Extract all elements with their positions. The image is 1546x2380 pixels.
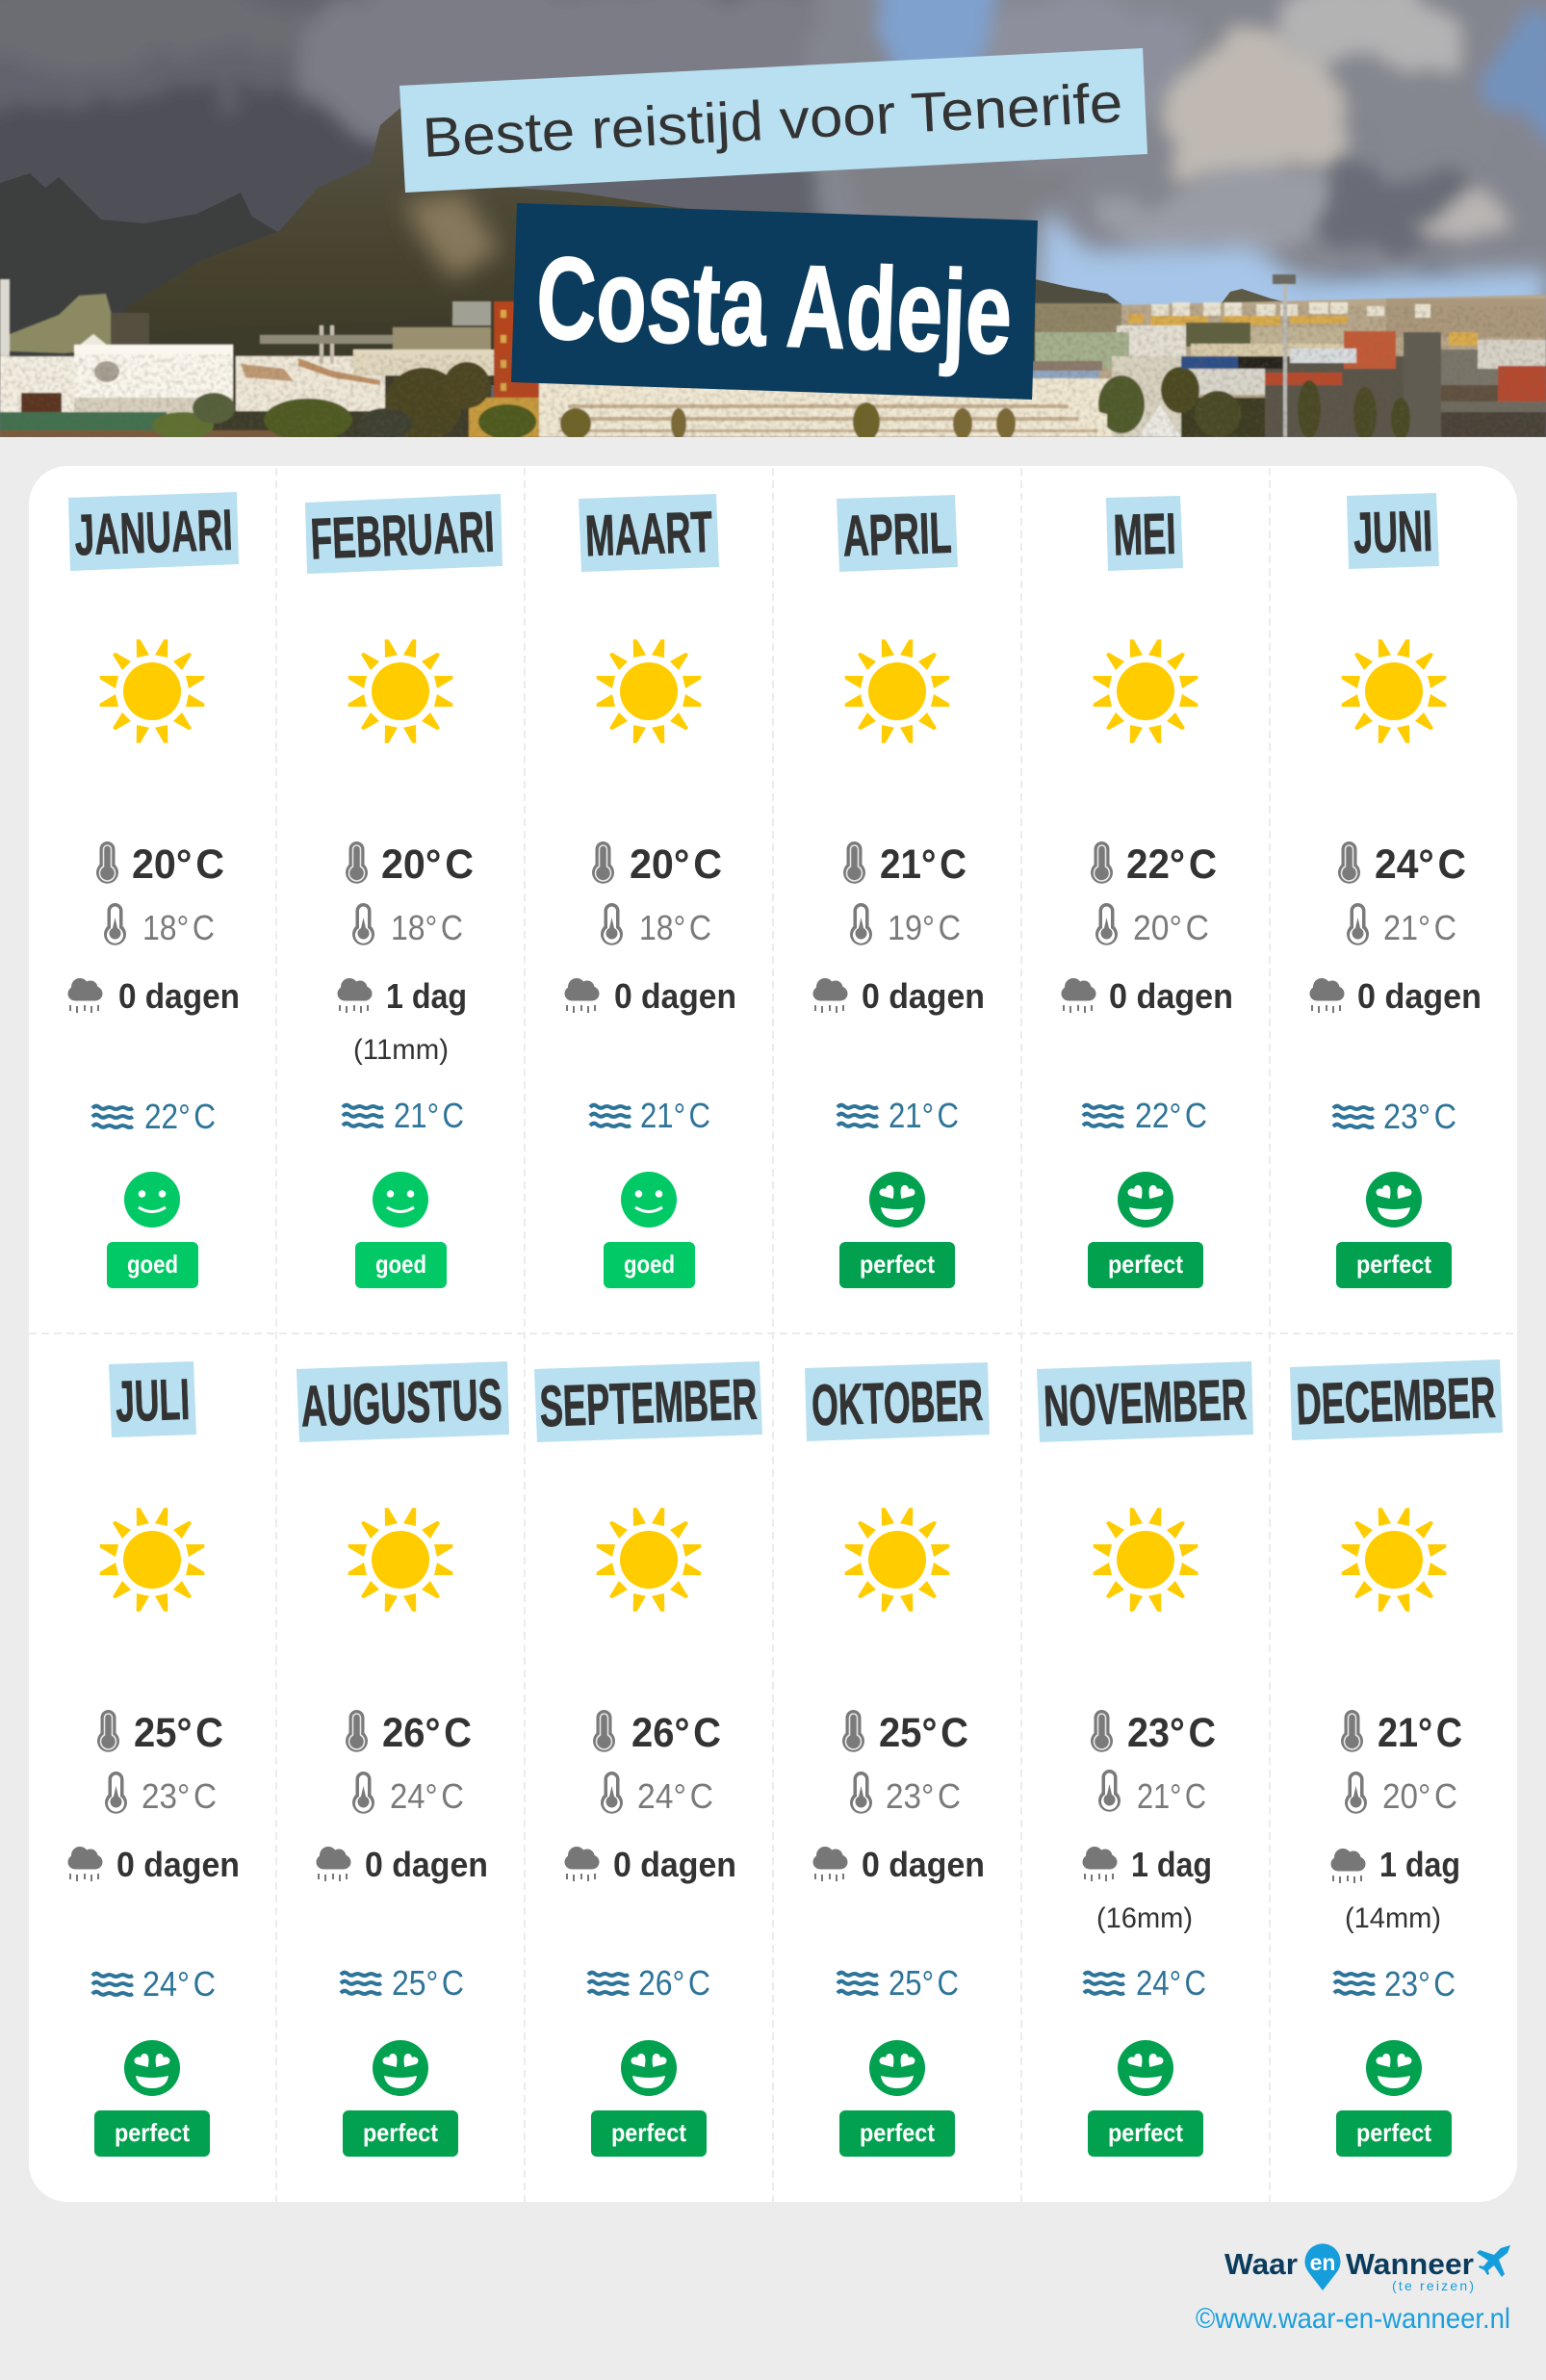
min temperature xyxy=(352,903,463,947)
sea temperature: 23°C xyxy=(1383,1097,1456,1136)
copyright url: ©www.waar-en-wanneer.nl xyxy=(1196,2303,1510,2335)
min temperature: 18°C xyxy=(391,908,463,947)
min temperature: 20°C xyxy=(1133,908,1209,947)
max temperature: 20°C xyxy=(630,841,722,888)
rating: perfect: perfect xyxy=(1108,2118,1183,2147)
sea temperature: 24°C xyxy=(142,1964,216,2004)
max temperature: 21°C xyxy=(1378,1710,1462,1756)
rain days: 0 dagen xyxy=(116,1845,240,1884)
rain days xyxy=(1309,976,1482,1016)
rain days: 0 dagen xyxy=(614,976,736,1016)
sea temperature xyxy=(1083,1096,1207,1135)
min temperature: 21°C xyxy=(1383,908,1456,947)
rain days xyxy=(316,1845,488,1884)
rating: goed xyxy=(604,1172,695,1288)
max temperature xyxy=(593,1710,721,1756)
rain days xyxy=(337,976,467,1066)
rating: perfect: perfect xyxy=(1108,1250,1183,1279)
min temperature xyxy=(352,1772,464,1816)
min temperature xyxy=(1095,903,1209,947)
rating: goed: goed xyxy=(127,1250,178,1279)
column: oktober xyxy=(805,1362,990,2157)
max temperature: 26°C xyxy=(631,1710,721,1756)
sea temperature: 25°C xyxy=(392,1963,464,2003)
rating: goed: goed xyxy=(375,1250,426,1279)
rain days xyxy=(564,976,736,1016)
rating: perfect: perfect xyxy=(1356,2118,1431,2147)
rain days xyxy=(812,976,985,1016)
min temperature xyxy=(1345,1772,1457,1816)
icon: sun xyxy=(597,639,701,743)
max temperature: 22°C xyxy=(1126,841,1217,888)
sea temperature xyxy=(590,1096,710,1135)
rating: goed xyxy=(107,1172,198,1288)
blue sky lower right xyxy=(1035,207,1546,327)
month label: Februari xyxy=(305,494,502,574)
sea temperature: 21°C xyxy=(640,1096,710,1135)
icon: sun xyxy=(1094,1508,1198,1612)
min temperature: 23°C xyxy=(142,1776,217,1816)
min temperature: 24°C xyxy=(390,1776,464,1816)
sea temperature xyxy=(341,1963,464,2003)
rain days xyxy=(67,976,240,1016)
min temperature xyxy=(601,903,711,947)
max temperature xyxy=(1341,1710,1462,1756)
min temperature: 24°C xyxy=(637,1776,713,1816)
column: april xyxy=(812,495,985,1288)
month label: Mei: MEI xyxy=(1113,502,1176,567)
column: juli xyxy=(67,1361,240,2157)
sea temperature xyxy=(1084,1963,1206,2003)
title banner: Beste reistijd voor Tenerife xyxy=(399,48,1147,193)
logo: Waar en Wanneer: Wanneer xyxy=(1346,2247,1474,2281)
rain days: 0 dagen xyxy=(862,976,985,1016)
icon: sun xyxy=(348,1508,452,1612)
column: maart xyxy=(564,494,736,1288)
column: februari xyxy=(305,494,502,1288)
rating: perfect xyxy=(1088,1172,1203,1288)
rain days: 0 dagen xyxy=(1109,976,1233,1016)
left buildings xyxy=(125,318,491,437)
sea temperature: 21°C xyxy=(889,1096,959,1135)
month label: Februari: FEBRUARI xyxy=(309,500,496,571)
min temperature: 19°C xyxy=(888,908,961,947)
sea temperature xyxy=(92,1964,216,2004)
sea temperature: 24°C xyxy=(1136,1963,1206,2003)
rating: perfect: perfect xyxy=(860,1250,935,1279)
min temperature xyxy=(850,903,961,947)
month label: Maart: MAART xyxy=(584,500,713,568)
rain days xyxy=(1082,1845,1212,1934)
month label: Oktober xyxy=(805,1362,990,1441)
column: december xyxy=(1290,1359,1503,2157)
icon: sun xyxy=(100,639,204,743)
mountains xyxy=(0,173,284,385)
rating: perfect: perfect xyxy=(115,2118,190,2147)
max temperature: 25°C xyxy=(879,1710,968,1756)
month label: Mei xyxy=(1106,496,1183,571)
logo: Waar en Wanneer: Waar xyxy=(1224,2247,1298,2281)
rain days: 1 dag xyxy=(1131,1845,1212,1884)
min temperature: 18°C xyxy=(142,908,215,947)
max temperature: 24°C xyxy=(1375,841,1466,888)
month label: Juli: JULI xyxy=(115,1367,191,1434)
month label: Maart xyxy=(579,494,719,572)
column: januari xyxy=(67,492,240,1288)
column: mei xyxy=(1061,496,1233,1288)
rain days xyxy=(1061,976,1233,1016)
rain days: 0 dagen xyxy=(613,1845,736,1884)
max temperature xyxy=(1091,1710,1216,1756)
max temperature xyxy=(843,841,966,888)
rating: perfect: perfect xyxy=(611,2118,686,2147)
column: augustus xyxy=(296,1361,509,2157)
min temperature: 18°C xyxy=(639,908,711,947)
icon: sun xyxy=(845,639,949,743)
min temperature xyxy=(105,1772,217,1816)
month label: Augustus: AUGUSTUS xyxy=(299,1367,503,1438)
max temperature xyxy=(346,1710,472,1756)
sea temperature: 22°C xyxy=(144,1097,216,1136)
panel: months card xyxy=(29,466,1517,2202)
rating: perfect xyxy=(839,2040,955,2157)
sea temperature xyxy=(1334,1964,1456,2004)
sea temperature xyxy=(837,1963,959,2003)
column: juni xyxy=(1309,493,1482,1288)
logo: Waar en Wanneer xyxy=(1224,2243,1510,2293)
min temperature xyxy=(1347,903,1456,947)
rain days: 1 dag xyxy=(1379,1845,1460,1884)
icon: sun xyxy=(1094,639,1198,743)
max temperature: 23°C xyxy=(1127,1710,1216,1756)
month label: Januari xyxy=(68,492,239,571)
rating: perfect xyxy=(343,2040,458,2157)
rating: perfect xyxy=(1336,1172,1452,1288)
sea temperature xyxy=(588,1963,710,2003)
sea temperature xyxy=(343,1096,464,1135)
logo: Waar en Wanneer: (te reizen) xyxy=(1392,2278,1474,2293)
title banner: Costa Adeje: Costa Adeje xyxy=(534,232,1014,378)
rain days: (11mm) xyxy=(353,1034,449,1066)
rain days: 0 dagen xyxy=(365,1845,488,1884)
icon: sun xyxy=(1342,1508,1446,1612)
rating: perfect xyxy=(94,2040,210,2157)
rain days xyxy=(564,1845,736,1884)
max temperature: 25°C xyxy=(134,1710,223,1756)
rating: perfect xyxy=(1336,2040,1452,2157)
month label: April: APRIL xyxy=(841,501,953,568)
min temperature: 21°C xyxy=(1137,1776,1206,1816)
rain days xyxy=(67,1845,240,1884)
month label: April xyxy=(837,495,958,572)
sea temperature xyxy=(1333,1097,1456,1136)
month label: November xyxy=(1037,1361,1253,1442)
rain days xyxy=(1330,1845,1460,1934)
rating: perfect xyxy=(591,2040,707,2157)
rain days: (14mm) xyxy=(1345,1902,1441,1934)
title banner: Costa Adeje xyxy=(511,203,1038,400)
rating: perfect: perfect xyxy=(363,2118,438,2147)
month label: Oktober: OKTOBER xyxy=(811,1368,984,1437)
max temperature: 26°C xyxy=(382,1710,472,1756)
rain days xyxy=(812,1845,985,1884)
rain days: 1 dag xyxy=(386,976,467,1016)
month label: September xyxy=(534,1361,762,1442)
icon: sun xyxy=(845,1508,949,1612)
max temperature xyxy=(842,1710,968,1756)
min temperature xyxy=(850,1772,961,1816)
rain days: (16mm) xyxy=(1096,1902,1193,1934)
max temperature: 20°C xyxy=(132,841,224,888)
sea temperature: 21°C xyxy=(394,1096,464,1135)
min temperature xyxy=(1098,1770,1206,1816)
rain days: 0 dagen xyxy=(862,1845,985,1884)
max temperature: 21°C xyxy=(880,841,966,888)
title banner: Beste reistijd voor Tenerife: Beste reistijd voor Tenerife xyxy=(421,71,1124,169)
min temperature xyxy=(104,903,215,947)
min temperature: 23°C xyxy=(886,1776,961,1816)
rating: perfect xyxy=(1088,2040,1203,2157)
rating: goed xyxy=(355,1172,447,1288)
sea temperature: 22°C xyxy=(1135,1096,1207,1135)
rain days: 0 dagen xyxy=(118,976,240,1016)
rating: perfect: perfect xyxy=(860,2118,935,2147)
sea temperature xyxy=(837,1096,959,1135)
rain days: 0 dagen xyxy=(1357,976,1482,1016)
town xyxy=(0,274,1546,441)
logo: Waar en Wanneer: en xyxy=(1310,2250,1335,2275)
hero photo: Costa Adeje town and mountains under clouds xyxy=(0,0,1546,441)
column: november xyxy=(1037,1361,1253,2157)
sea temperature xyxy=(92,1097,216,1136)
rating: perfect xyxy=(839,1172,955,1288)
icon: sun xyxy=(597,1508,701,1612)
rating: perfect: perfect xyxy=(1356,1250,1431,1279)
rating: goed: goed xyxy=(624,1250,675,1279)
month label: September: SEPTEMBER xyxy=(538,1367,759,1438)
min temperature: 20°C xyxy=(1382,1776,1457,1816)
icon: sun xyxy=(100,1508,204,1612)
sea temperature: 25°C xyxy=(889,1963,959,2003)
month label: Juni xyxy=(1347,493,1439,569)
month label: Juni: JUNI xyxy=(1353,499,1433,565)
min temperature xyxy=(601,1772,713,1816)
sea temperature: 23°C xyxy=(1384,1964,1456,2004)
max temperature: 20°C xyxy=(381,841,474,888)
max temperature xyxy=(97,1710,223,1756)
icon: sun xyxy=(348,639,452,743)
column: september xyxy=(534,1361,762,2157)
month label: Januari: JANUARI xyxy=(73,498,234,567)
sea temperature: 26°C xyxy=(638,1963,710,2003)
month label: Juli xyxy=(109,1361,196,1437)
month label: Augustus xyxy=(296,1361,509,1442)
icon: sun xyxy=(1342,639,1446,743)
month label: November: NOVEMBER xyxy=(1043,1367,1248,1438)
